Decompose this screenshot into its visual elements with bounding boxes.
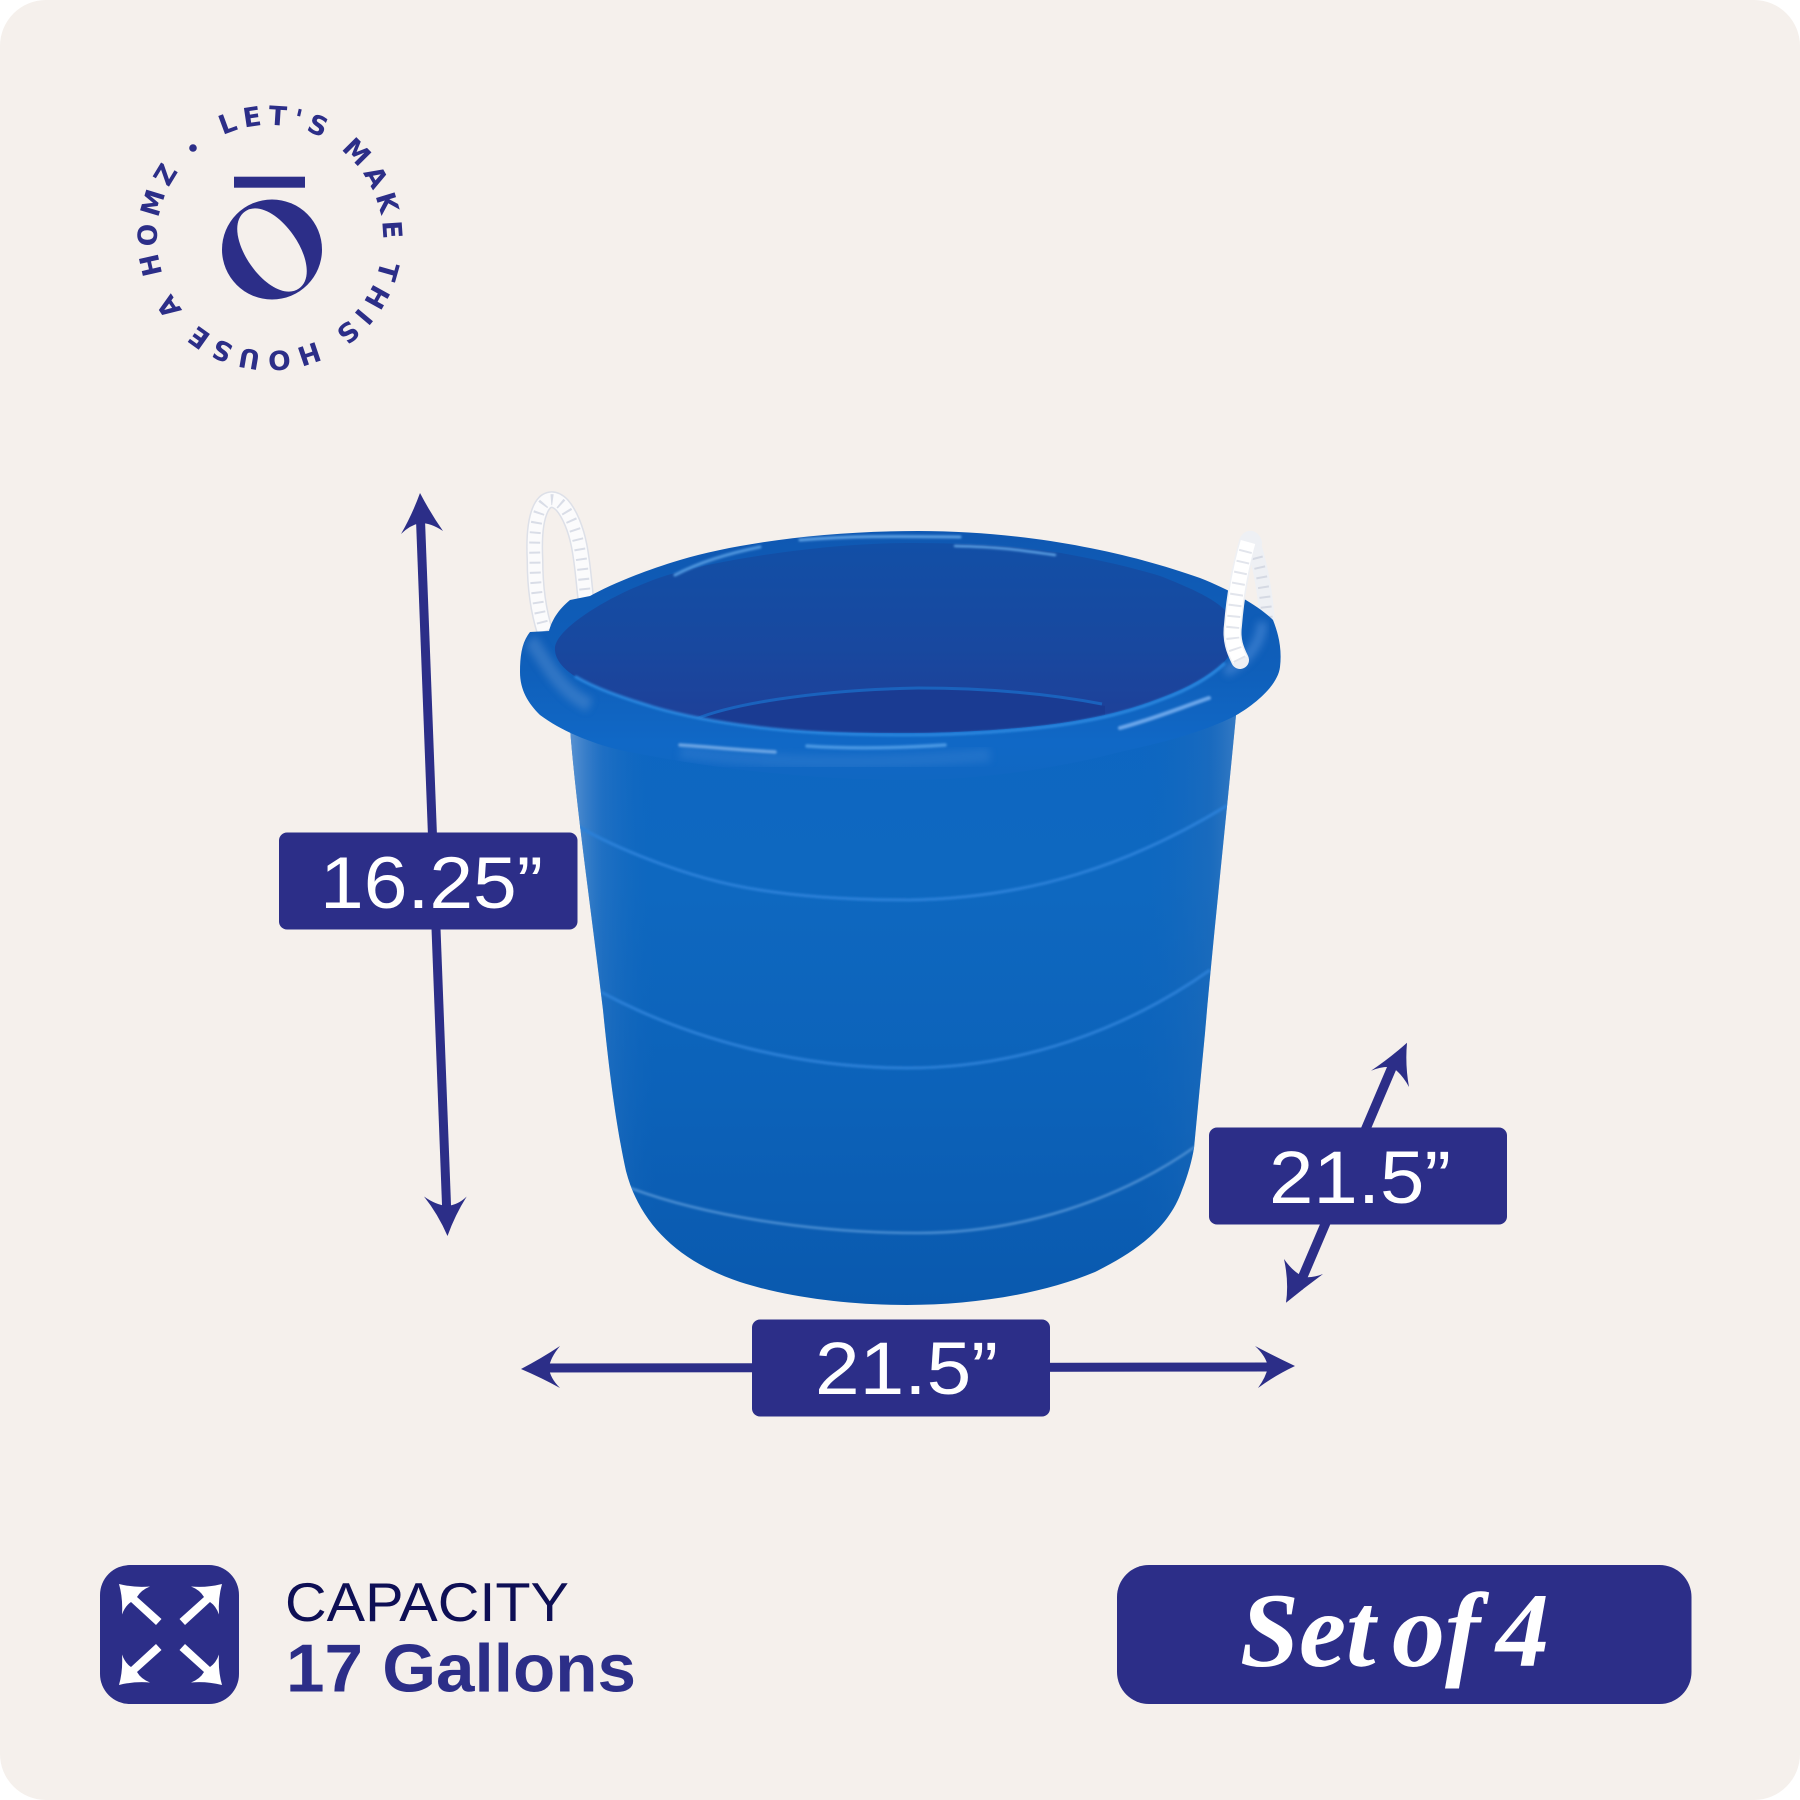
- set of 4 badge: [1117, 1565, 1692, 1704]
- width arrow: [521, 1346, 1295, 1388]
- right rope handle, rear strand: [1253, 543, 1268, 628]
- arrow down-left: [119, 1644, 162, 1685]
- height label: [279, 832, 578, 930]
- rim right sheen: [1225, 622, 1262, 672]
- width label: [752, 1320, 1050, 1416]
- rim front haze: [680, 752, 990, 762]
- rib 1: [578, 805, 1228, 900]
- tub rim: [520, 531, 1281, 780]
- left rope handle: [535, 500, 586, 632]
- rib 3: [625, 1146, 1196, 1233]
- depth label: [1209, 1128, 1507, 1224]
- width label: 21.5”: [815, 1327, 998, 1410]
- logo mark opening: [224, 197, 320, 303]
- rim left sheen: [530, 640, 590, 705]
- capacity text: 17 Gallons: [286, 1630, 636, 1706]
- height label: 16.25”: [320, 843, 543, 924]
- logo badge: [137, 105, 403, 370]
- height arrow: [401, 493, 467, 1236]
- arrow up-right: [180, 1584, 222, 1625]
- set of 4 badge: Set: [1240, 1572, 1379, 1689]
- set of 4 badge: 4: [1494, 1572, 1549, 1689]
- tub product image: [520, 500, 1281, 1305]
- arrow up-left: [119, 1584, 162, 1625]
- logo ring dot: [189, 144, 197, 152]
- logo ring text: LET'S MAKE THIS HOUSE A HOMZ: [137, 105, 403, 370]
- set of 4 badge: of: [1392, 1572, 1490, 1689]
- capacity text: [285, 1571, 636, 1706]
- tub interior: [555, 543, 1235, 745]
- logo bar: [234, 177, 305, 188]
- logo mark: [222, 200, 322, 300]
- capacity text: CAPACITY: [285, 1571, 569, 1633]
- rib 2: [601, 970, 1210, 1068]
- right rope handle, front strand: [1232, 540, 1253, 660]
- tub body: [569, 705, 1237, 1305]
- depth label: 21.5”: [1269, 1136, 1451, 1219]
- arrow down-right: [180, 1644, 222, 1685]
- icon: capacity arrows: [100, 1565, 239, 1704]
- rim highlights: [576, 536, 1224, 752]
- depth arrow: [1284, 1043, 1409, 1303]
